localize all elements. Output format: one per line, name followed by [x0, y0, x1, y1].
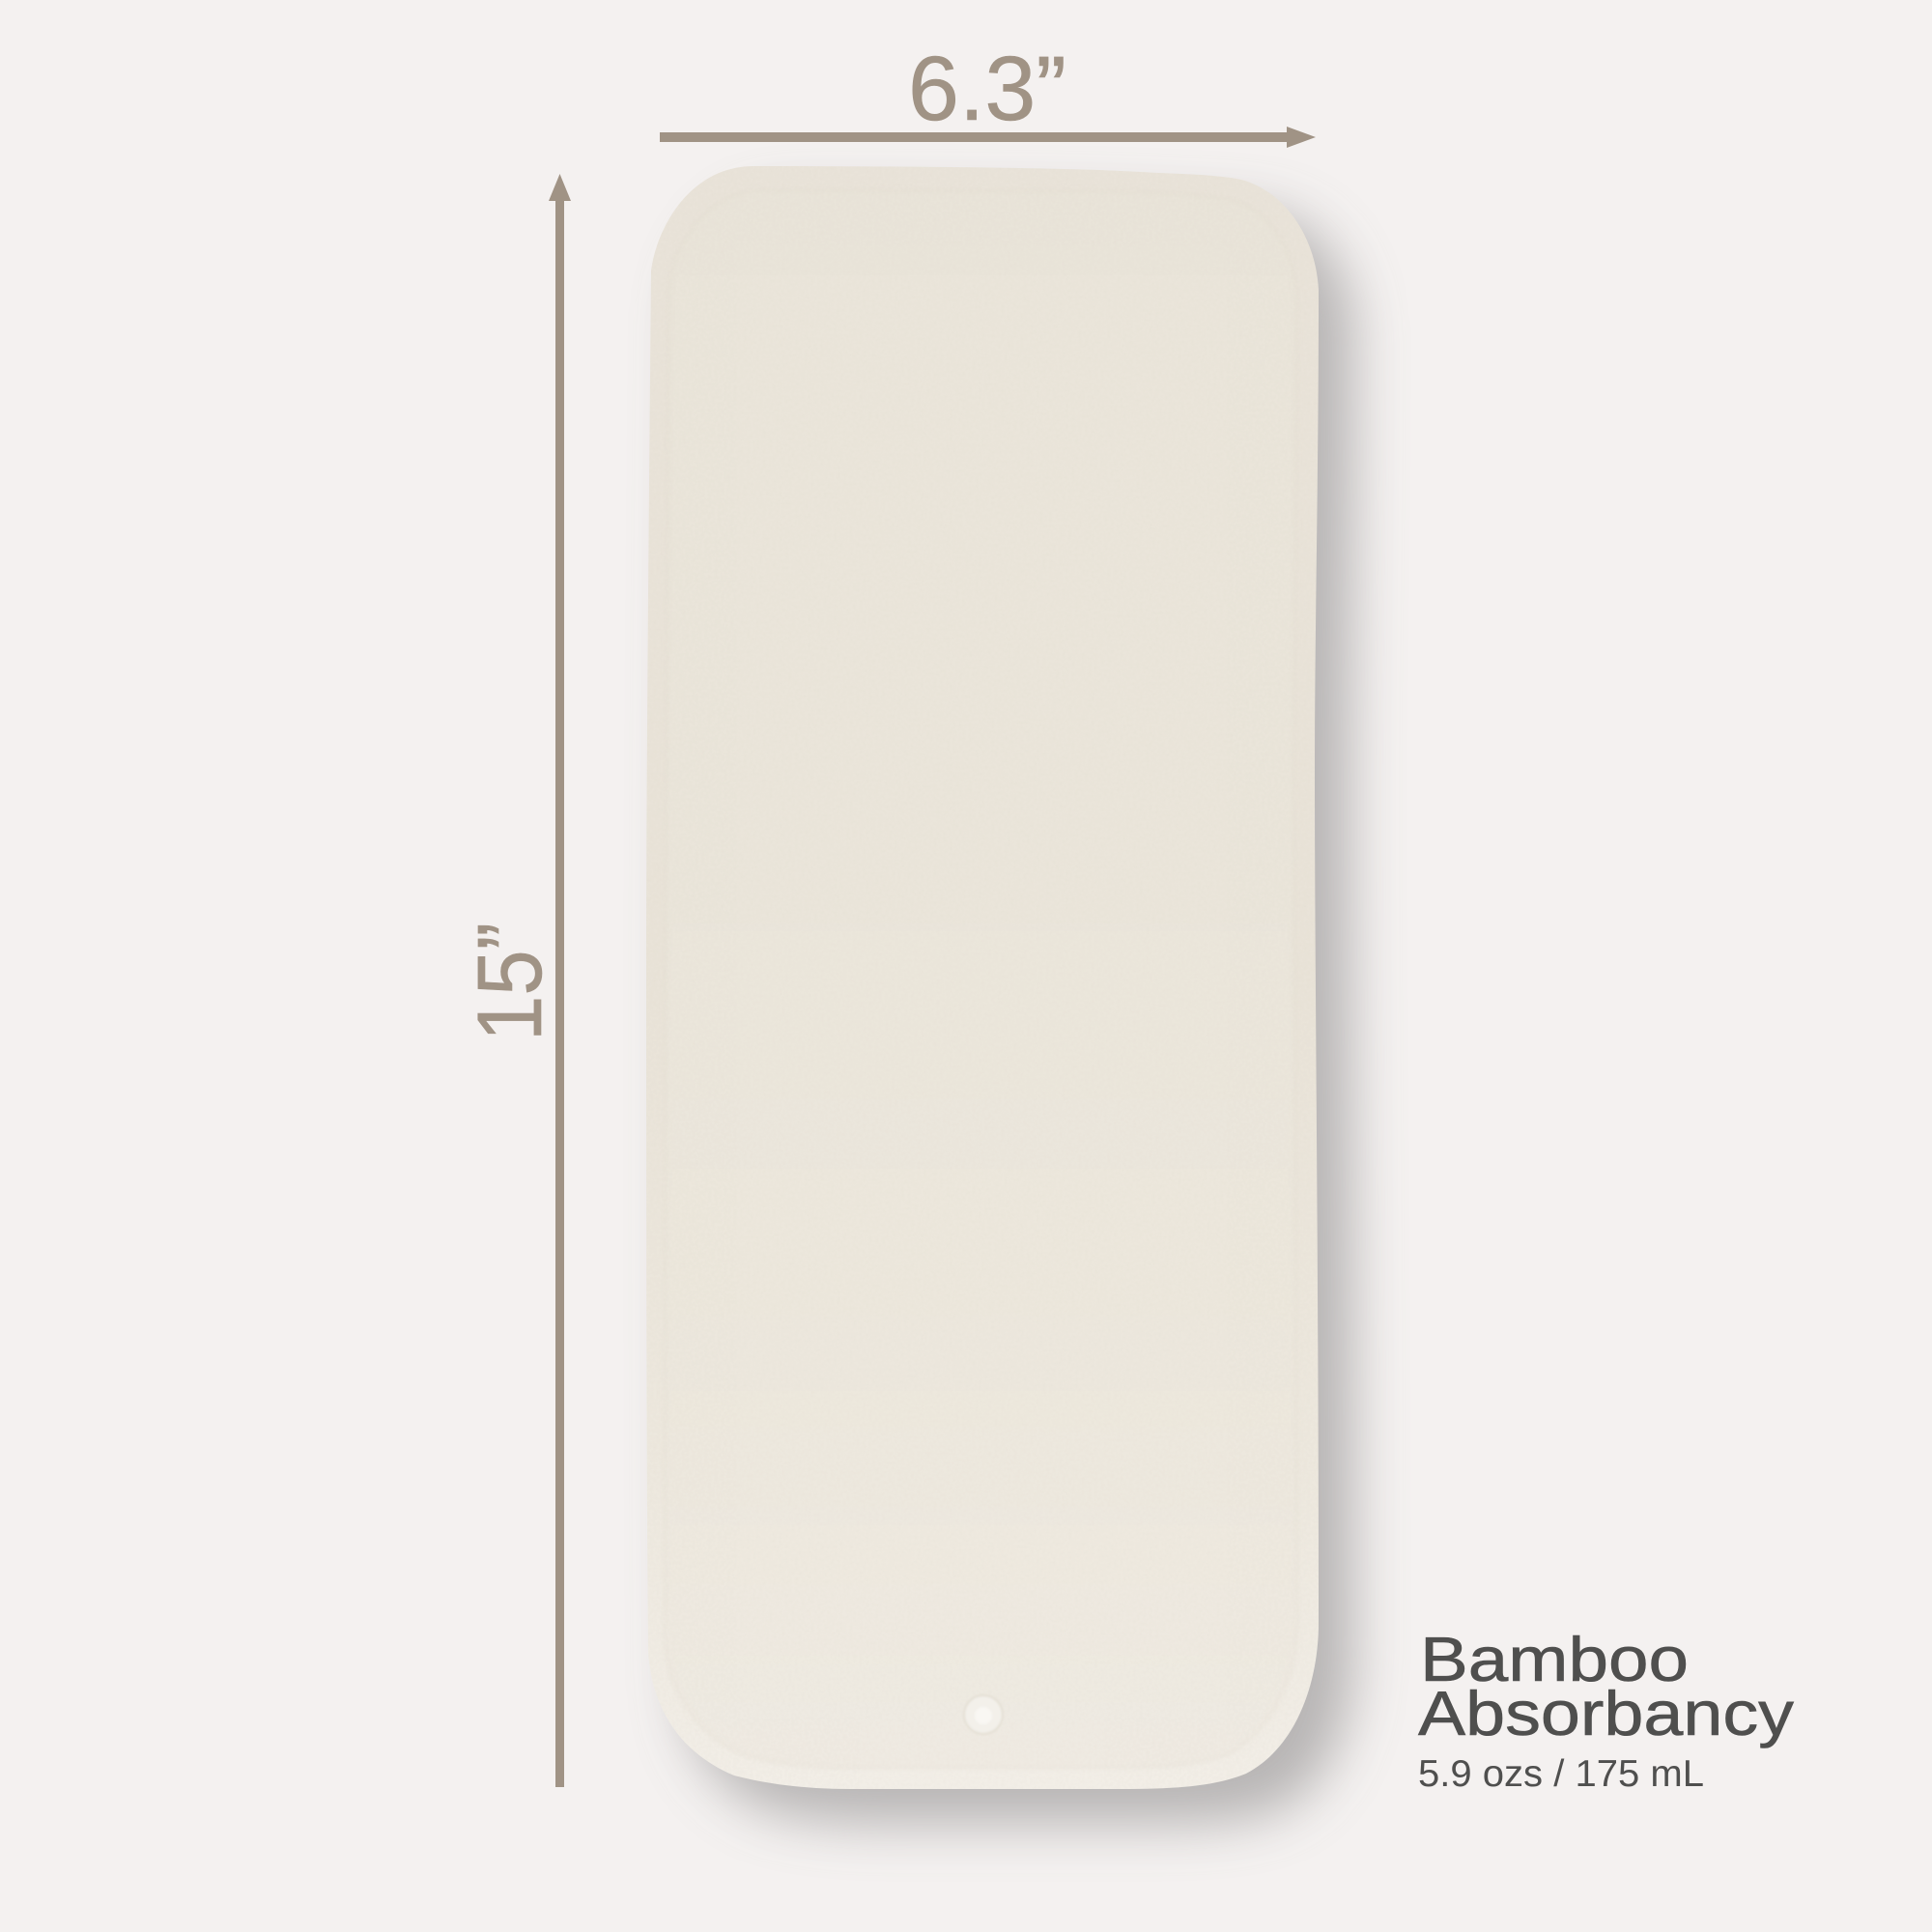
width label: 6.3”	[908, 38, 1066, 140]
absorbancy callout	[1418, 1624, 1795, 1795]
width arrow	[660, 127, 1316, 148]
height arrow	[549, 174, 571, 1787]
bamboo insert pad	[638, 159, 1328, 1797]
snap button	[964, 1695, 1003, 1734]
infographic canvas	[477, 56, 1795, 1853]
drop shadow of pad	[681, 201, 1353, 1824]
callout heading line 1: Bamboo	[1420, 1624, 1689, 1694]
callout heading line 2: Absorbancy	[1418, 1678, 1795, 1748]
callout value: 5.9 ozs / 175 mL	[1418, 1753, 1704, 1795]
height label: 15”	[459, 923, 561, 1041]
